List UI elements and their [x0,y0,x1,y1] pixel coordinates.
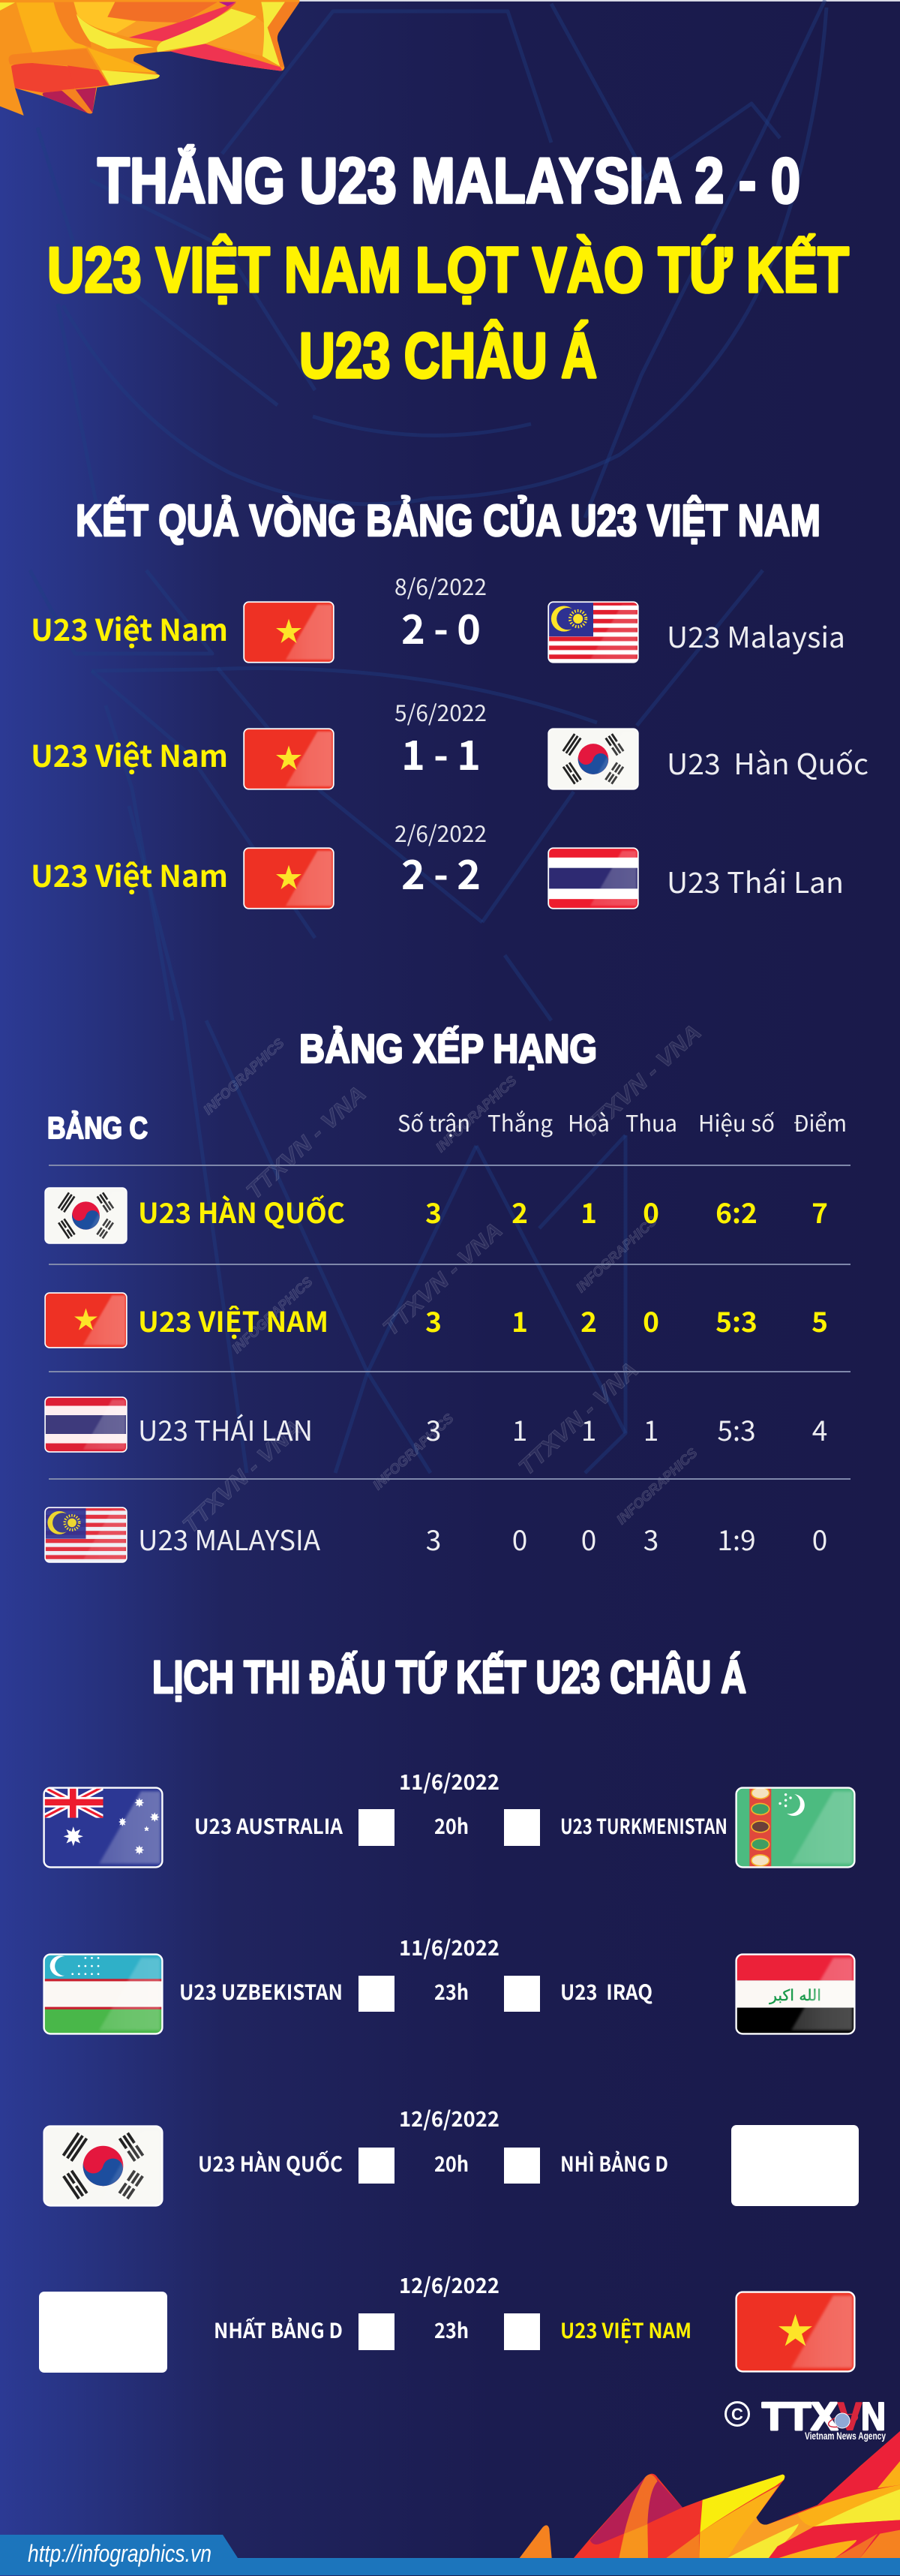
match result 2: 1 - 1 [401,723,481,782]
row: Vietnam: 1 [512,1300,528,1340]
fixture 3: 12/6/2022 [399,2103,500,2133]
fixture 3: NHÌ BẢNG D [560,2148,668,2178]
table header: Số trận [398,1105,470,1138]
row: Thailand: 1 [644,1408,658,1449]
match result 3: 2 - 2 [401,842,481,901]
fixture 3 [43,2103,859,2207]
watermarks: INFOGRAPHICS [370,1411,457,1492]
table header: Hoà [568,1105,610,1138]
row: Malaysia: 3 [644,1518,658,1559]
watermarks: TTXVN - VNA [378,1218,508,1341]
row: Vietnam: 2 [580,1300,597,1340]
row: Vietnam [44,1292,828,1348]
row: Korea: U23 HÀN QUỐC [138,1191,345,1231]
row: Malaysia: 3 [426,1518,441,1559]
row: Thailand: U23 THÁI LAN [138,1408,313,1449]
logo: TTXVN: V [838,2395,862,2439]
logo: TTXVN [726,2395,886,2442]
row: Thailand: 4 [812,1408,827,1449]
table header: Thắng [488,1105,553,1138]
row: Korea: 7 [812,1191,828,1231]
watermarks: INFOGRAPHICS [573,1213,660,1295]
row: Malaysia: 0 [581,1518,596,1559]
bottom flame decoration [520,2431,900,2558]
watermarks: INFOGRAPHICS [614,1445,700,1527]
row: Vietnam: 5:3 [716,1300,758,1340]
watermarks: TTXVN - VNA [178,1415,308,1538]
match result 1: U23 Malaysia [667,615,845,656]
fixture 4: U23 VIỆT NAM [560,2315,692,2345]
row: Thailand: 1 [581,1408,596,1449]
row: Thailand: 5:3 [717,1408,756,1449]
fixture 2: 11/6/2022 [399,1932,500,1962]
flag: Iraq: الله اكبر [769,1986,821,2004]
fixture 4: NHẤT BẢNG D [214,2315,343,2345]
main title: U23 CHÂU Á [299,320,597,392]
row: Korea: 0 [643,1191,659,1231]
match result 1: 8/6/2022 [394,569,487,602]
fixture 2: U23 UZBEKISTAN [179,1976,343,2006]
match result 3: U23 Thái Lan [667,860,844,901]
match result 3: U23 Việt Nam [31,852,228,896]
watermarks [178,1020,706,1538]
logo: TTXVN: N [861,2395,886,2439]
fixture 2: U23 IRAQ [560,1976,652,2006]
flag: Iraq [735,1953,856,2035]
logo: TTXVN: C [731,2405,743,2424]
table header: Hiệu số [698,1105,775,1138]
row: Korea: 2 [512,1191,528,1231]
row: Malaysia [44,1507,827,1563]
row: Vietnam: 0 [643,1300,659,1340]
fixture 1: U23 TURKMENISTAN [560,1811,728,1841]
fixture 3: U23 HÀN QUỐC [198,2148,343,2178]
row: Malaysia: 1:9 [717,1518,756,1559]
fixture 3: 20h [434,2148,469,2178]
match result 2: U23 Việt Nam [31,732,228,776]
row: Korea: 3 [425,1191,442,1231]
row: Thailand [44,1396,827,1453]
match result 3 [31,816,844,909]
match result 2: U23 Hàn Quốc [667,741,868,783]
watermarks: TTXVN - VNA [242,1081,371,1204]
match result 3: 2/6/2022 [394,816,487,849]
match result 1 [31,569,845,663]
heading: standings: BẢNG XẾP HẠNG [299,1026,597,1072]
table header [47,1105,847,1145]
row: Thailand: 3 [426,1408,441,1449]
main title [47,145,849,392]
row: Malaysia: U23 MALAYSIA [138,1518,320,1559]
row: Thailand: 1 [512,1408,527,1449]
fixture 1: U23 AUSTRALIA [194,1811,344,1841]
watermarks: INFOGRAPHICS [229,1274,316,1356]
footer bar [0,2535,900,2575]
fixture 2: 23h [434,1976,469,2006]
fixture 4: 12/6/2022 [399,2270,500,2300]
row: Vietnam: U23 VIỆT NAM [138,1300,328,1340]
watermarks: TTXVN - VNA [577,1020,706,1143]
match result 1: 2 - 0 [401,597,481,656]
fixture 1: 11/6/2022 [399,1766,500,1796]
row: Korea: 1 [580,1191,597,1231]
footer url: http://infographics.vn [28,2540,212,2567]
row: Malaysia: 0 [812,1518,827,1559]
row: Vietnam: 3 [425,1300,442,1340]
fixture 4: 23h [434,2315,469,2345]
row: Korea: 6:2 [716,1191,758,1231]
row: Vietnam: 5 [812,1300,828,1340]
match result 1: U23 Việt Nam [31,606,228,650]
match result 2 [31,695,868,790]
watermarks: TTXVN - VNA [514,1357,644,1480]
table header: Thua [626,1105,677,1138]
logo: TTXVN: TTX [762,2395,838,2439]
fixture 1 [43,1766,856,1868]
fixture 1: 20h [434,1811,469,1841]
watermarks: INFOGRAPHICS [200,1036,287,1117]
fixture 2 [43,1932,856,2035]
standings table [44,1105,850,1563]
table header: Điểm [794,1105,847,1138]
table header: BẢNG C [47,1111,148,1145]
row: Malaysia: 0 [512,1518,527,1559]
watermarks: INFOGRAPHICS [433,1073,520,1155]
fixture 4 [39,2270,856,2373]
top corner flame decoration [0,0,299,116]
match result 2: 5/6/2022 [394,695,487,728]
row: Korea [44,1187,828,1244]
